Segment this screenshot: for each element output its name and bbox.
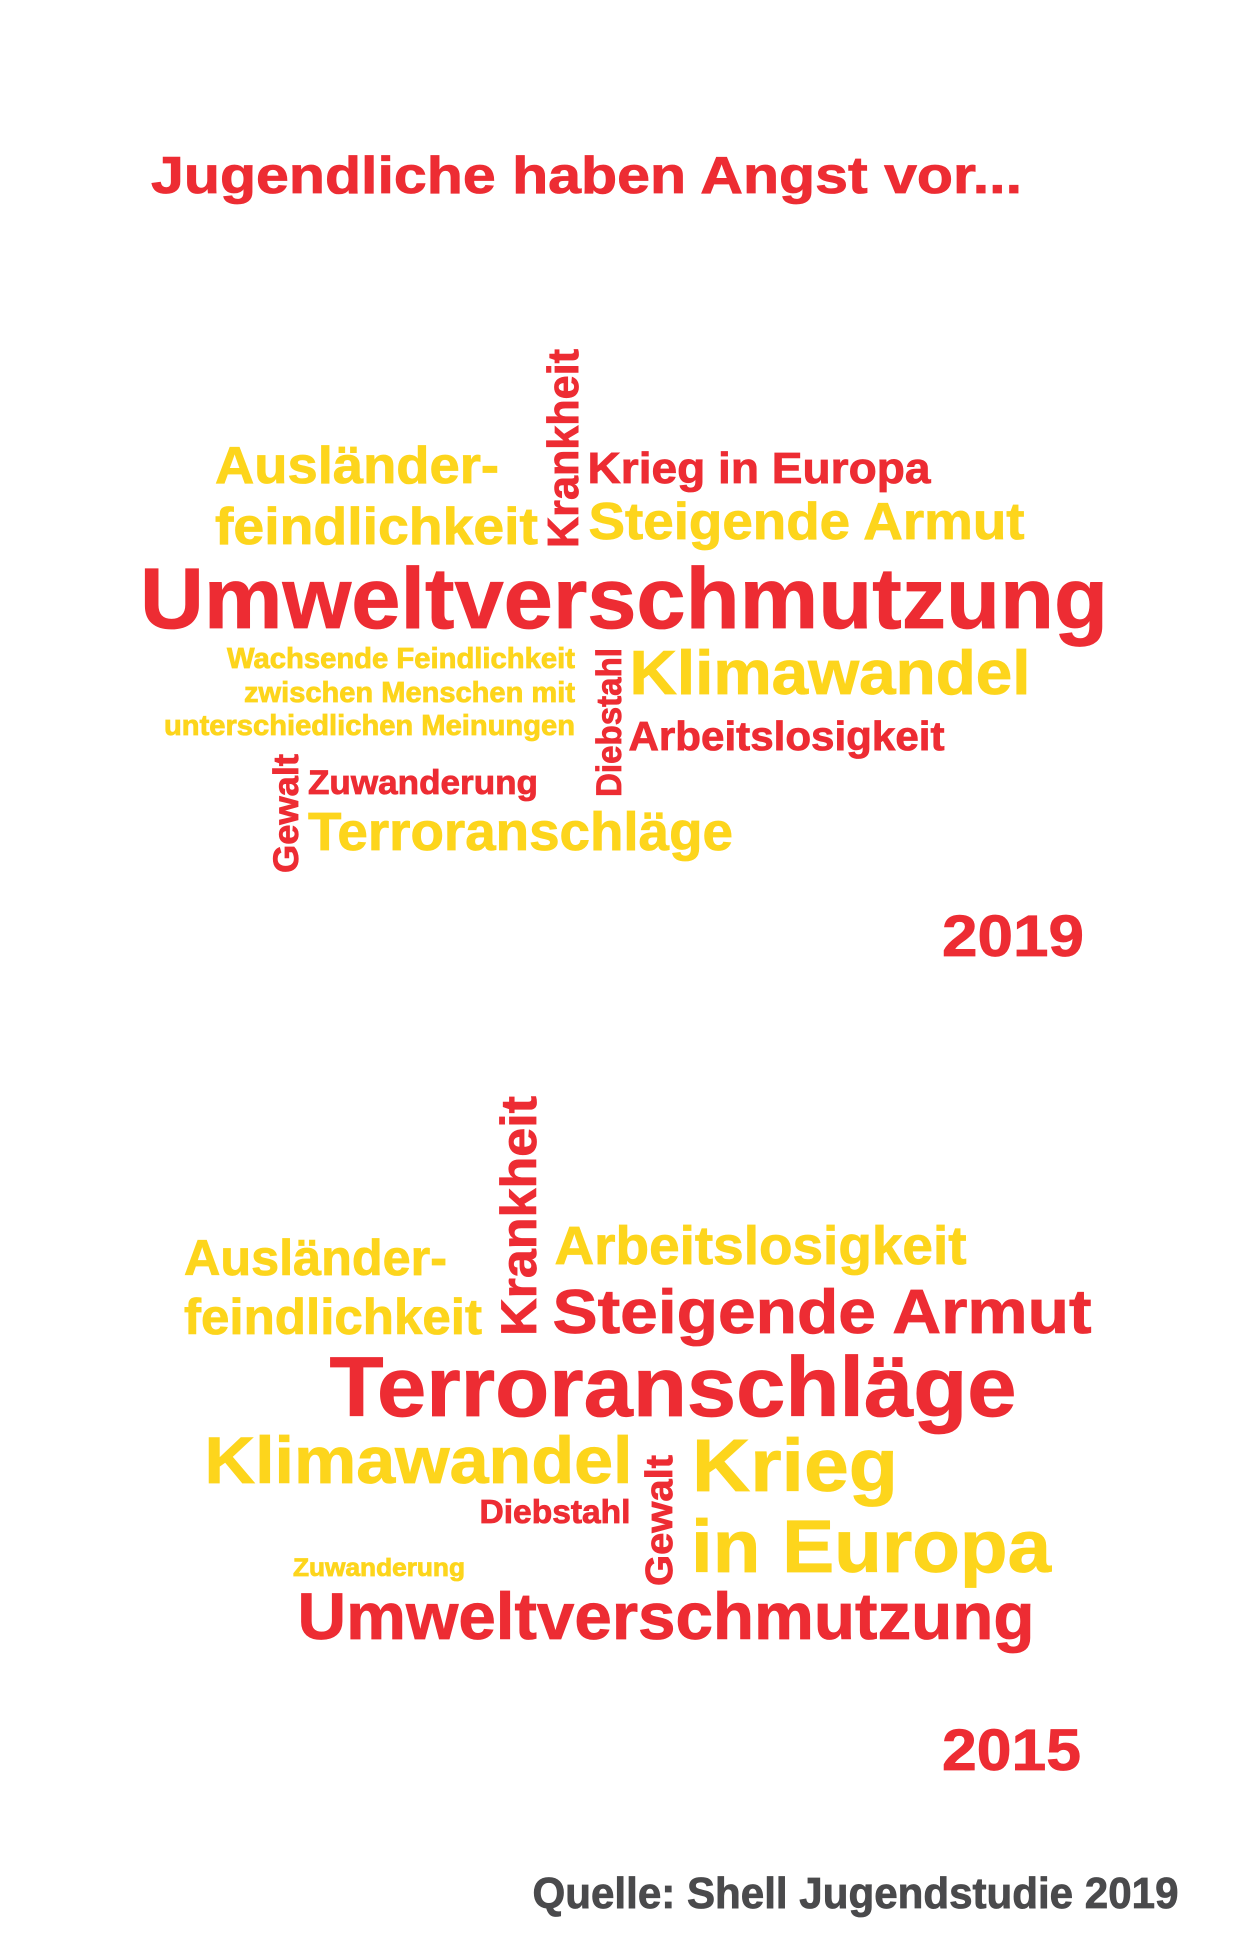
word: Krieg in Europa: Krieg in Europa (588, 444, 931, 493)
word: Krankheit: Krankheit (539, 349, 588, 548)
word: Arbeitslosigkeit: Arbeitslosigkeit (628, 713, 945, 759)
word: Ausländer-feindlichkeit: feindlichkeit (184, 1289, 482, 1345)
word: Krieg in Europa: Krieg (692, 1424, 898, 1507)
year label 2019: 2019 (942, 904, 1084, 969)
word: Krankheit: Krankheit (491, 1096, 547, 1336)
word: Umweltverschmutzung: Umweltverschmutzung (140, 551, 1108, 647)
word: Klimawandel: Klimawandel (630, 639, 1030, 708)
word: Zuwanderung: Zuwanderung (293, 1554, 465, 1582)
word: Umweltverschmutzung: Umweltverschmutzung (298, 1579, 1034, 1653)
word: Steigende Armut: Steigende Armut (588, 493, 1024, 551)
word: Ausländer-feindlichkeit: Ausländer- (215, 437, 499, 495)
word: Wachsende Feindlichkeit zwischen Menschen mit unterschiedlichen Meinungen (164, 643, 575, 742)
word: Steigende Armut: Steigende Armut (552, 1278, 1092, 1347)
word: Krieg in Europa (691, 1424, 1052, 1588)
word: Gewalt: Gewalt (267, 754, 306, 873)
word: Wachsende Feindlichkeit zwischen Menschen mit unterschiedlichen Meinungen: zwischen Menschen mit (244, 677, 575, 709)
title: Jugendliche haben Angst vor... (151, 147, 1022, 205)
word: Wachsende Feindlichkeit zwischen Menschen mit unterschiedlichen Meinungen: unterschiedlichen Meinungen (164, 710, 575, 742)
word: Diebstahl: Diebstahl (590, 648, 629, 797)
word: Ausländer-feindlichkeit: feindlichkeit (215, 498, 538, 556)
word: Terroranschläge: Terroranschläge (308, 802, 733, 862)
word: Klimawandel: Klimawandel (204, 1423, 632, 1497)
panel: word cloud 2019 (140, 349, 1108, 873)
word: Arbeitslosigkeit: Arbeitslosigkeit (554, 1216, 967, 1276)
word: Ausländer-feindlichkeit: Ausländer- (184, 1230, 447, 1286)
word: Ausländer-feindlichkeit (184, 1230, 482, 1345)
word: Diebstahl: Diebstahl (480, 1493, 630, 1530)
word: Terroranschläge: Terroranschläge (330, 1340, 1016, 1434)
word: Wachsende Feindlichkeit zwischen Menschen mit unterschiedlichen Meinungen: Wachsende Feindlichkeit (227, 643, 575, 675)
year label 2015: 2015 (942, 1718, 1081, 1783)
word: Gewalt: Gewalt (639, 1455, 681, 1586)
panel: word cloud 2015 (184, 1096, 1092, 1653)
word: Zuwanderung: Zuwanderung (308, 764, 538, 802)
source line: Quelle: Shell Jugendstudie 2019 (532, 1869, 1178, 1918)
word: Ausländer-feindlichkeit (215, 437, 538, 556)
word: Krieg in Europa: in Europa (691, 1505, 1052, 1588)
